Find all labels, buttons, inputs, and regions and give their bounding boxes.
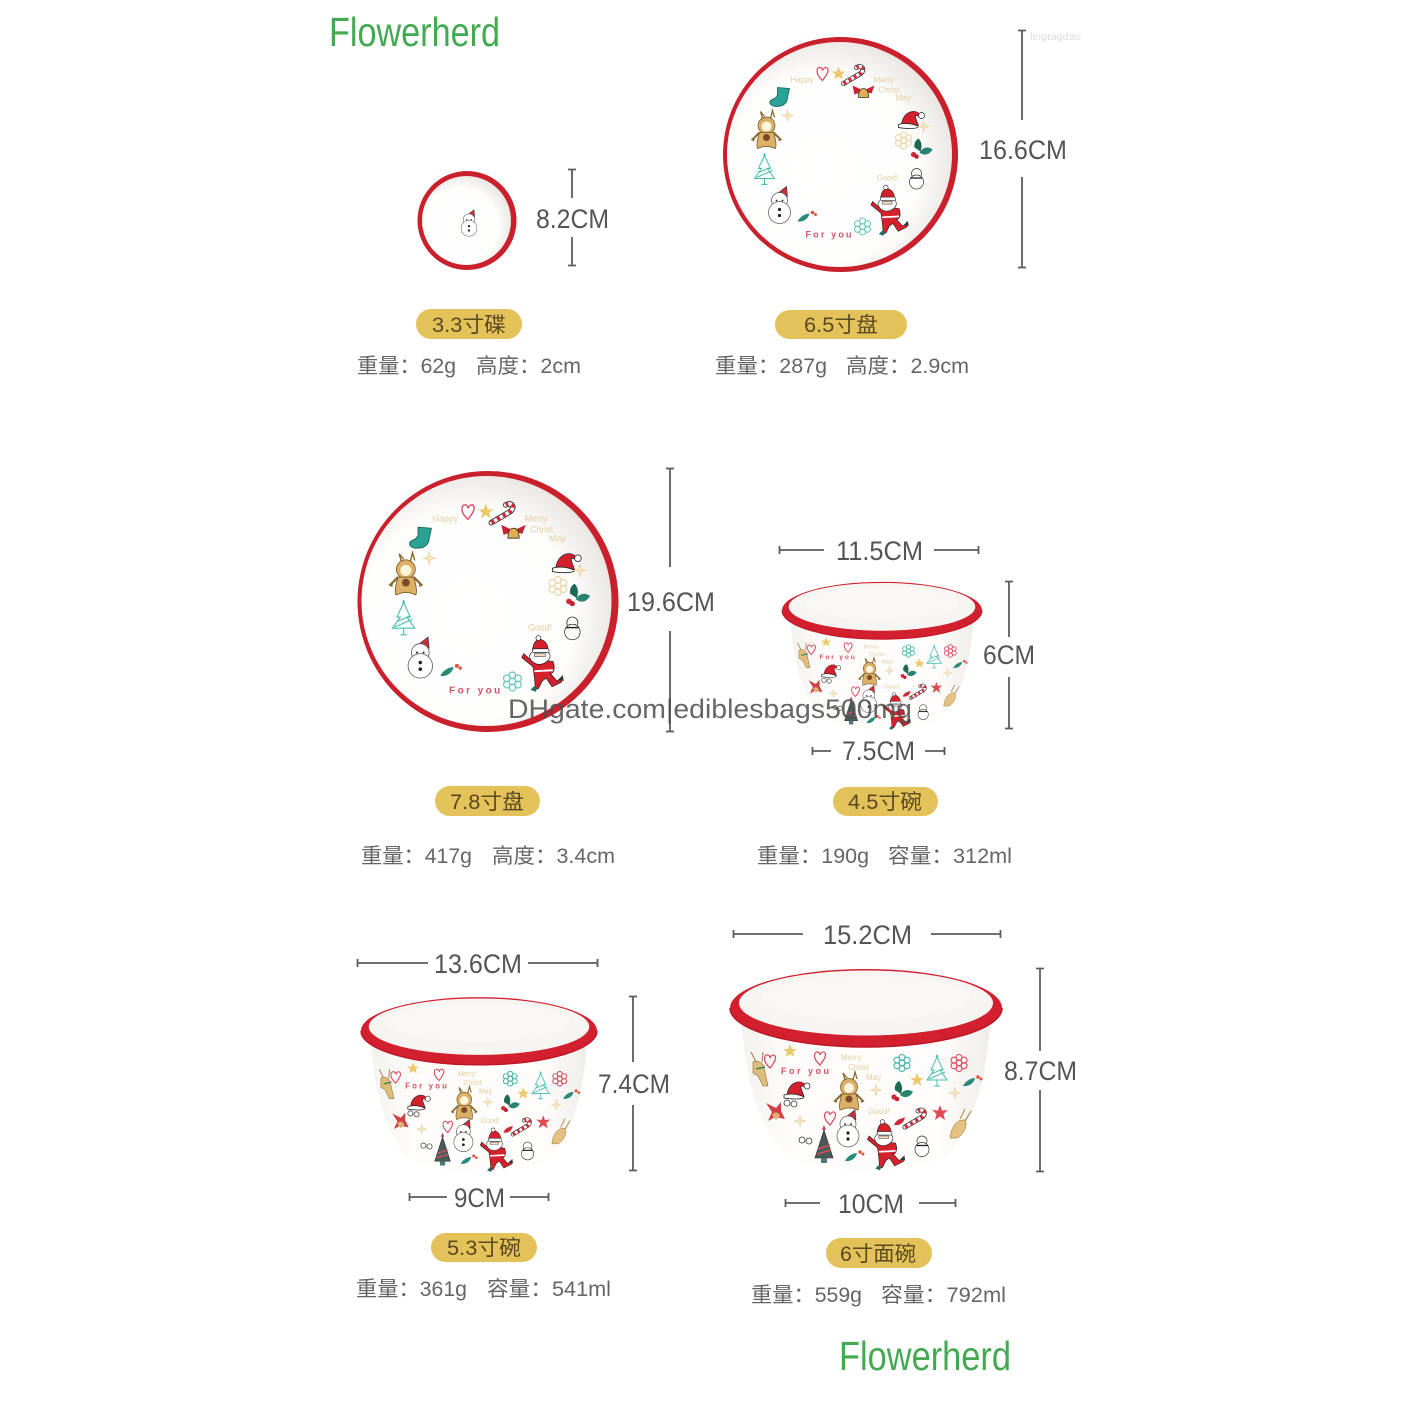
product: 6 inch noodle bowl [730,920,1077,1307]
label pill: 4.5寸碗: 4.5寸碗 [848,791,922,814]
specs: 6.5寸盘: 高度：2.9cm [846,355,969,378]
dimension: 8.2CM: 8.2CM [536,204,609,234]
icon: 4.5 bowl [782,582,982,730]
specs: 6寸面碗: 重量：559g [751,1284,862,1307]
label pill: 6寸面碗: 6寸面碗 [840,1243,916,1266]
icon: 7.8 plate with Christmas motifs: May [549,534,566,544]
icon: 6.5 plate with Christmas motifs: Happy [790,76,814,84]
icon: 6.5 plate with Christmas motifs: May [896,94,911,102]
icon: 6.5 plate with Christmas motifs: For you [806,230,852,240]
specs: 7.8寸盘 [361,845,615,868]
icon: 7.8 plate with Christmas motifs: For you [449,686,500,697]
icon: 6 inch bowl: May [866,1073,881,1082]
specs: 7.8寸盘: 高度：3.4cm [492,845,615,868]
icon: 5.3 bowl: Good! [481,1118,500,1125]
dimension: 7.5CM [812,736,945,766]
dimension: 16.6CM [979,30,1067,268]
icon: 7.8 plate with Christmas motifs: Happy [432,514,459,524]
label pill: 5.3寸碗: 5.3寸碗 [447,1237,521,1260]
icon: 5.3 bowl: May [479,1088,493,1095]
icon: 6.5 plate with Christmas motifs [723,37,958,272]
icon: 4.5 bowl: May [882,659,893,665]
icon: 4.5 bowl: Good! [883,684,900,690]
specs: 3.3寸碟: 高度：2cm [476,355,581,378]
icon: 6 inch bowl: Good! [868,1107,890,1116]
dimension: 6CM [983,581,1035,729]
icon: 7.8 plate with Christmas motifs: Merry [525,514,548,524]
label pill: 6寸面碗 [826,1238,932,1268]
icon: 4.5 bowl: For you [820,654,855,661]
dimension: 15.2CM [733,920,1001,950]
dimension: 10CM: 10CM [838,1189,904,1219]
seller watermark: DHgate.com|ediblesbags500mg [508,694,912,724]
dimension: 19.6CM: 19.6CM [627,587,715,617]
product: 7.8 inch plate [358,468,715,868]
dimension: 7.4CM [598,996,670,1171]
specs: 5.3寸碗 [356,1278,611,1301]
specs: 3.3寸碟 [357,355,581,378]
product: 3.3 inch dish [357,169,609,378]
specs: 5.3寸碗: 容量：541ml [487,1278,611,1301]
label pill: 3.3寸碟: 3.3寸碟 [432,314,506,337]
label pill: 6.5寸盘: 6.5寸盘 [804,314,878,337]
dimension: 7.5CM: 7.5CM [842,736,915,766]
faint watermark: lingtagdao [1030,32,1081,43]
dimension: 19.6CM [627,468,715,732]
dimension: 9CM: 9CM [454,1183,505,1213]
product: 6.5 inch plate [715,30,1067,378]
label pill: 5.3寸碗 [431,1233,537,1262]
label pill: 3.3寸碟 [416,309,522,339]
icon: 6.5 plate with Christmas motifs: Christ [878,86,900,94]
brand logo top: Flowerherd [329,9,500,55]
dimension: 7.4CM: 7.4CM [598,1069,670,1099]
dimension: 8.7CM: 8.7CM [1004,1056,1077,1086]
specs: 7.8寸盘: 重量：417g [361,845,472,868]
icon: 5.3 bowl [361,997,597,1172]
dimension: 13.6CM: 13.6CM [434,949,522,979]
icon: 6 inch bowl [730,969,1002,1170]
dimension: 6CM: 6CM [983,640,1035,670]
icon: 4.5 bowl: Merry [864,645,879,651]
label pill: 4.5寸碗 [833,787,938,816]
icon: small dish [418,171,516,270]
icon: 5.3 bowl: Christ [463,1080,482,1087]
dimension: 15.2CM: 15.2CM [823,920,912,950]
dimension: 9CM [409,1183,549,1213]
icon: 5.3 bowl: For you [405,1081,447,1090]
label pill: 7.8寸盘: 7.8寸盘 [450,791,524,814]
icon: 4.5 bowl: Christ [869,652,884,658]
icon: 7.8 plate with Christmas motifs: Good! [528,622,552,632]
dimension: 16.6CM: 16.6CM [979,135,1067,165]
product: 4.5 inch bowl [757,536,1035,868]
label pill: 7.8寸盘 [435,786,540,816]
icon: 7.8 plate with Christmas motifs [358,471,618,732]
icon: 6.5 plate with Christmas motifs: Merry [874,76,894,84]
dimension: 10CM [785,1189,956,1219]
dimension: 11.5CM: 11.5CM [836,536,923,566]
dimension: 11.5CM [779,536,979,566]
dimension: 13.6CM [357,949,598,979]
specs: 3.3寸碟: 重量：62g [357,355,456,378]
icon: 6 inch bowl: Merry [841,1053,861,1062]
specs: 6.5寸盘: 重量：287g [715,355,827,378]
specs: 4.5寸碗 [757,845,1012,868]
label pill: 6.5寸盘 [775,310,907,339]
icon: 6.5 plate with Christmas motifs: Good! [876,174,898,182]
specs: 6寸面碗: 容量：792ml [881,1284,1006,1307]
specs: 5.3寸碗: 重量：361g [356,1278,467,1301]
icon: 6 inch bowl: For you [781,1066,829,1076]
specs: 6寸面碗 [751,1284,1006,1307]
icon: 7.8 plate with Christmas motifs: Christ [530,525,554,535]
dimension: 8.2CM [536,169,609,266]
specs: 4.5寸碗: 重量：190g [757,845,869,868]
icon: 6 inch bowl: Christ [848,1063,870,1072]
specs: 4.5寸碗: 容量：312ml [888,845,1012,868]
specs: 6.5寸盘 [715,355,969,378]
icon: 5.3 bowl: Merry [457,1071,476,1078]
dimension: 8.7CM [1004,968,1077,1172]
product: 5.3 inch bowl [356,949,670,1301]
brand logo bottom: Flowerherd [839,1333,1011,1379]
